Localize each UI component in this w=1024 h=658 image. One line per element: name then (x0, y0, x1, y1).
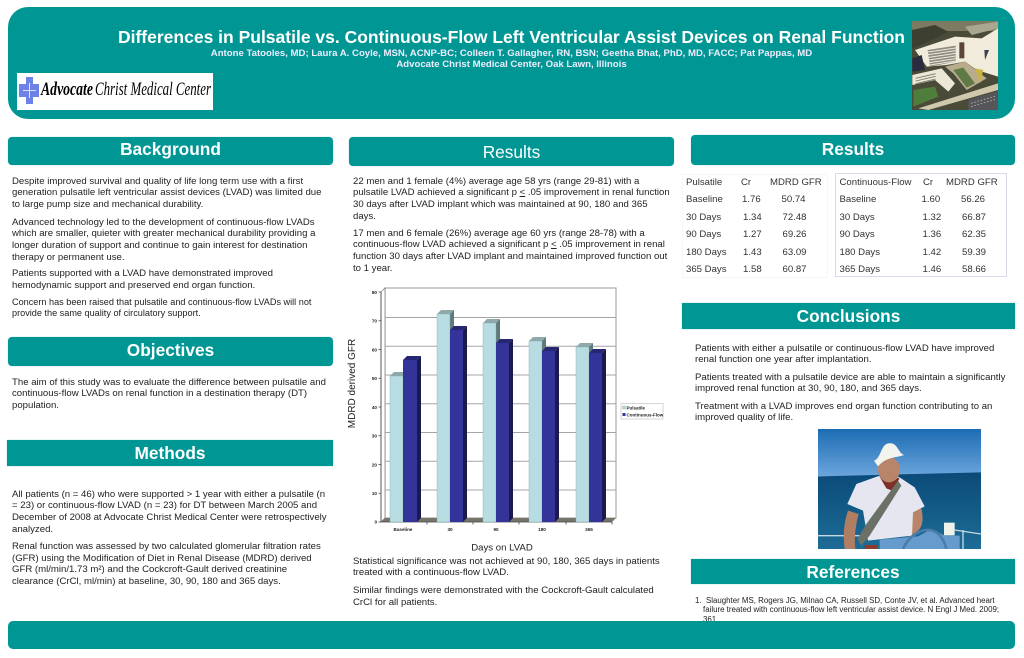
x axis tick labels: 365 (585, 527, 593, 532)
text: background paragraph 4 (12, 296, 312, 318)
table: continuous-flow: 30 Days (840, 212, 875, 222)
text: continuous-flow results: 17 men and 6 female (26%) average age 60 yrs (range 28-78) with a (353, 228, 645, 238)
y axis tick labels: 70 (372, 318, 377, 324)
text: reference 1 (695, 596, 999, 624)
table: pulsatile (682, 174, 828, 278)
table: pulsatile: 60.87 (782, 264, 807, 274)
text: methods paragraph 1 (12, 488, 327, 535)
text: methods paragraph 1: December of 2008 at Advocate Christ Medical Center were retrospectively (12, 512, 327, 523)
text: background paragraph 1: generation pulsatile left ventricular assist devices (LVAD) was limited due (12, 187, 321, 198)
text: background paragraph 2: therapy or permanent use. (12, 252, 125, 263)
text: continuous-flow results: to 1 year. (353, 263, 392, 274)
text: Cockcroft-Gault note (353, 585, 654, 608)
table: continuous-flow: 365 Days (840, 264, 880, 274)
text: reference 1: failure treated with continuous-flow left ventricular assist device. N Engl J Med. 2009; (703, 605, 999, 614)
table: pulsatile: 180 Days (686, 246, 727, 258)
table: pulsatile: 1.76 (742, 194, 761, 205)
text: objectives: continuous-flow LVADs on renal function in a destination therapy (DT) (12, 388, 307, 399)
text: background paragraph 1: to large pump size and mechanical durability. (12, 199, 203, 210)
header banner (8, 7, 1015, 119)
text: methods paragraph 2: Renal function was assessed by two calculated glomerular filtration rates (12, 541, 321, 552)
y axis tick labels (372, 290, 377, 524)
table: pulsatile: Pulsatile (686, 176, 722, 188)
text: pulsatile results (353, 176, 670, 222)
bars: 90 days (483, 319, 513, 522)
table: continuous-flow: 180 Days (840, 246, 880, 258)
panel: methods (6, 439, 334, 587)
affiliation: Advocate Christ Medical Center, Oak Lawn, Illinois (396, 59, 627, 70)
text: background paragraph 2: longer duration of support and continue to gain interest for destination (12, 240, 307, 251)
footer banner (8, 621, 1015, 649)
table: continuous-flow: Continuous-Flow (840, 176, 912, 188)
text: statistical significance note (353, 556, 660, 578)
text: conclusion 3 (695, 400, 992, 423)
text: continuous-flow results: function 30 days after LVAD implant and maintained improved function out (353, 251, 667, 262)
y axis tick labels: 60 (372, 348, 377, 352)
text: background paragraph 3 (12, 268, 273, 291)
text: background paragraph 2: which are smaller, quieter with greater mechanical durability providing a (12, 228, 315, 239)
table: continuous-flow: 59.39 (962, 246, 986, 258)
table: pulsatile: Baseline (686, 194, 723, 205)
text: statistical significance note: treated with a continuous-flow LVAD. (353, 567, 509, 578)
text: methods paragraph 2: (GFR) using the Modification of Diet in Renal Disease (MDRD) derived (12, 553, 312, 564)
table: continuous-flow: 66.87 (962, 212, 986, 222)
bar chart: MDRD derived GFR by days on LVAD (347, 287, 664, 554)
table: pulsatile: 90 Days (686, 229, 721, 240)
text: methods paragraph 2: GFR (ml/min/1.73 m²) and the Cockcroft-Gault derived creatinine (12, 564, 287, 575)
text: background paragraph 1: Despite improved survival and quality of life long term use with a first (12, 176, 303, 186)
logo: Advocate Christ Medical Center (17, 73, 213, 110)
table: pulsatile: 365 Days (686, 264, 727, 274)
table: continuous-flow: 1.46 (922, 264, 941, 274)
text: statistical significance note: Statistical significance was not achieved at 90, 180, 365 days in patients (353, 556, 660, 566)
text: background paragraph 4: provide the same quality of circulatory support. (12, 308, 201, 318)
panel: references (690, 558, 1016, 624)
text: background paragraph 3: Patients supported with a LVAD have demonstrated improved (12, 268, 273, 279)
x axis title: Days on LVAD (471, 542, 533, 554)
text: pulsatile results: pulsatile LVAD achieved a significant p < .05 improvement in renal function (353, 187, 670, 198)
text: pulsatile results: 30 days after LVAD implant which was maintained at 90, 180 and 365 (353, 199, 648, 210)
text: background paragraph 3: hemodynamic support and preserved end organ function. (12, 280, 255, 291)
table: pulsatile: 63.09 (782, 246, 807, 258)
text: background paragraph 4: Concern has been raised that pulsatile and continuous-flow LVADs will not (12, 296, 311, 306)
y axis tick labels: 20 (372, 462, 377, 468)
x axis tick labels (394, 527, 593, 532)
table: continuous-flow: 1.60 (922, 194, 940, 205)
text: objectives: population. (12, 400, 59, 411)
table: pulsatile: 1.34 (743, 212, 762, 222)
text: methods paragraph 2: clearance (CrCl, ml/min) at baseline, 30, 90, 180 and 365 days. (12, 576, 281, 587)
text: objectives: The aim of this study was to evaluate the difference between pulsatile and (12, 376, 326, 388)
text: conclusion 2 (695, 372, 1006, 394)
y axis tick labels: 80 (372, 290, 377, 295)
table: continuous-flow: Baseline (840, 194, 876, 205)
y axis tick labels: 50 (372, 376, 377, 381)
heading: Results (centre): Results (483, 142, 540, 162)
table: continuous-flow: 1.32 (922, 212, 941, 222)
bars: 365 days (576, 343, 606, 522)
x axis tick labels: 90 (493, 527, 499, 532)
panel: results text and chart (347, 136, 674, 608)
logo: Advocate Christ Medical Center: Advocate (40, 79, 93, 100)
bars: 30 days (437, 310, 467, 522)
table: continuous-flow: 58.66 (962, 264, 986, 274)
text: background paragraph 2 (12, 216, 316, 263)
heading: Results (centre) (349, 137, 674, 166)
text: conclusion 1 (695, 342, 994, 365)
text: methods paragraph 1: All patients (n = 46) who were supported > 1 year with either a pulsatile (n (12, 488, 325, 500)
table: pulsatile: 50.74 (782, 194, 806, 205)
panel: objectives (8, 336, 334, 411)
heading: Objectives (8, 337, 333, 366)
heading: Results (right) (691, 135, 1015, 165)
table: pulsatile: Cr (741, 176, 751, 188)
table: pulsatile: 30 Days (686, 212, 721, 222)
text: conclusion 1: Patients with either a pulsatile or continuous-flow LVAD have improved (695, 342, 994, 354)
text: reference 1: 1. Slaughter MS, Rogers JG, Milnao CA, Russell SD, Conte JV, et al. Advanced heart (695, 596, 995, 605)
bars: baseline (390, 356, 421, 522)
panel: conclusions (681, 302, 1016, 423)
table: continuous-flow: 62.35 (962, 229, 986, 240)
legend: Pulsatile (626, 406, 646, 410)
text: methods paragraph 2 (12, 541, 321, 587)
text: conclusion 3: Treatment with a LVAD improves end organ function contributing to an (695, 400, 992, 412)
text: background paragraph 1 (12, 176, 321, 210)
heading: Background: Background (120, 139, 221, 159)
table: continuous-flow: 90 Days (840, 229, 875, 240)
x axis tick labels: 180 (538, 527, 546, 532)
heading: Conclusions: Conclusions (797, 306, 900, 326)
text: methods paragraph 1: analyzed. (12, 524, 53, 535)
table: pulsatile: 1.27 (743, 229, 762, 240)
text: Cockcroft-Gault note: Similar findings were demonstrated with the Cockcroft-Gault calculated (353, 585, 654, 596)
panel: background (8, 136, 334, 318)
text: conclusion 2: Patients treated with a pulsatile device are able to maintain a significantly (695, 372, 1005, 382)
text: continuous-flow results: continuous-flow LVAD achieved a significant p < .05 improvement in renal (353, 239, 665, 250)
table: pulsatile: 72.48 (782, 212, 807, 222)
table: pulsatile: 69.26 (782, 229, 807, 240)
heading: Background (8, 137, 333, 165)
table: continuous-flow: 1.36 (922, 229, 941, 240)
authors: Antone Tatooles, MD; Laura A. Coyle, MSN, ACNP-BC; Colleen T. Gallagher, RN, BSN; Geetha Bhat, PhD, MD, FACC; Pat Pappas, MD (211, 48, 812, 58)
legend: Continuous-Flow (626, 412, 664, 418)
heading: References (691, 559, 1015, 584)
y axis tick labels: 0 (374, 520, 377, 524)
table: continuous-flow: MDRD GFR (946, 176, 998, 188)
text: reference 1: 361 (703, 615, 716, 624)
text: conclusion 1: renal function one year after implantation. (695, 354, 872, 365)
heading: Conclusions (682, 303, 1015, 329)
table: pulsatile: MDRD GFR (770, 176, 822, 188)
table: continuous-flow (835, 173, 1007, 277)
table: continuous-flow: 56.26 (961, 194, 985, 205)
heading: Methods: Methods (134, 443, 206, 463)
heading: Methods (7, 440, 333, 466)
heading: Objectives: Objectives (127, 340, 214, 360)
legend (621, 404, 664, 419)
title: Differences in Pulsatile vs. Continuous-Flow Left Ventricular Assist Devices on Renal Function (118, 27, 905, 47)
text: continuous-flow results (353, 228, 668, 274)
text: pulsatile results: days. (353, 211, 376, 222)
y axis tick labels: 40 (372, 405, 377, 410)
table: continuous-flow: Cr (923, 176, 933, 188)
heading: Results (right): Results (822, 139, 884, 159)
text: methods paragraph 1: = 23) or continuous-flow LVAD (n = 23) for DT between March 2005 and (12, 500, 317, 511)
table: pulsatile: 1.43 (743, 246, 762, 258)
table: pulsatile: 1.58 (743, 264, 762, 274)
text: conclusion 3: improved quality of life. (695, 412, 793, 423)
table: continuous-flow: 1.42 (922, 246, 941, 258)
photo: patient at the helm of a boat (818, 429, 981, 549)
bars: 180 days (529, 337, 559, 522)
text: objectives (12, 376, 326, 411)
y axis tick labels: 10 (372, 491, 377, 496)
y axis title: MDRD derived GFR (347, 339, 358, 428)
text: Cockcroft-Gault note: CrCl for all patients. (353, 597, 437, 608)
x axis tick labels: 30 (447, 527, 453, 532)
x axis tick labels: Baseline (394, 527, 413, 532)
hospital aerial photo (912, 21, 998, 110)
text: background paragraph 2: Advanced technology led to the development of continuous-flow LVADs (12, 216, 315, 228)
text: pulsatile results: 22 men and 1 female (4%) average age 58 yrs (range 29-81) with a (353, 176, 639, 186)
y axis tick labels: 30 (372, 434, 377, 438)
heading: References: References (806, 562, 900, 582)
text: conclusion 2: improved renal function at 30, 90, 180, and 365 days. (695, 383, 922, 394)
